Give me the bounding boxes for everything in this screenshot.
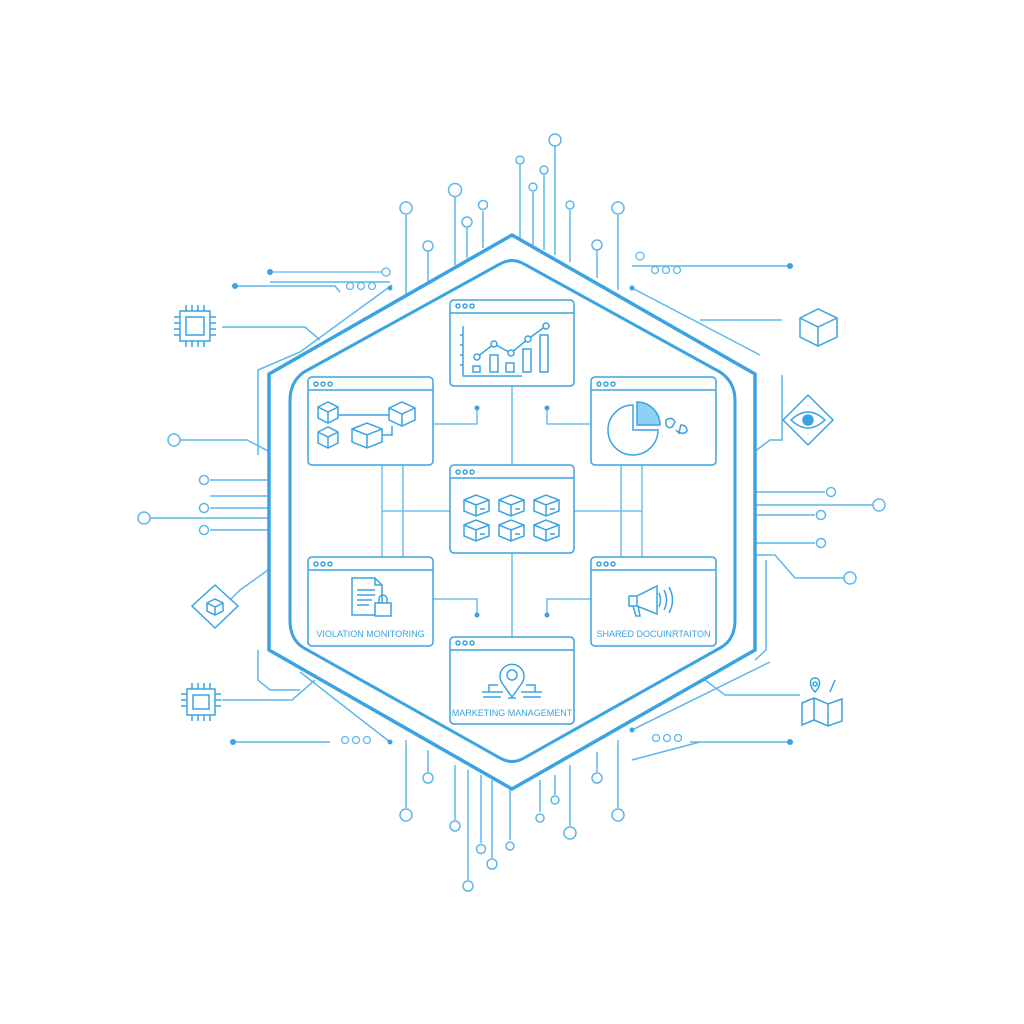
panel: shared documentation: [591, 557, 716, 646]
panel: blocks network (left top): [308, 377, 433, 465]
panel: marketing management: [450, 637, 574, 724]
icon: chip top-left: [174, 305, 216, 347]
icon: diamond box left: [192, 585, 238, 628]
top pins: [400, 134, 624, 295]
panel: pie chart (right top): [591, 377, 716, 465]
circuit traces: [138, 134, 885, 891]
left traces: [138, 282, 392, 742]
outer hexagon: [269, 235, 755, 789]
panel: violation monitoring: [308, 557, 433, 646]
icon: map pin right: [802, 678, 842, 726]
icon: eye diamond right: [783, 395, 833, 445]
panel: marketing management: MARKETING MANAGEMENT: [452, 708, 573, 718]
panel: violation monitoring: VIOLATION MONITORING: [316, 629, 425, 639]
inner rounded hexagon: [290, 260, 735, 762]
panel: shared documentation: SHARED DOCUINRTAITON: [596, 629, 711, 639]
connectors inside: [382, 386, 642, 637]
bottom pins: [400, 740, 624, 891]
trace end dots and ovals: [230, 263, 793, 745]
panel: analytics chart (top): [450, 300, 574, 386]
icon: cube right: [800, 309, 837, 346]
icon: chip bottom-left: [181, 683, 221, 721]
right traces: [632, 266, 885, 760]
panel: central blocks: [450, 465, 574, 553]
